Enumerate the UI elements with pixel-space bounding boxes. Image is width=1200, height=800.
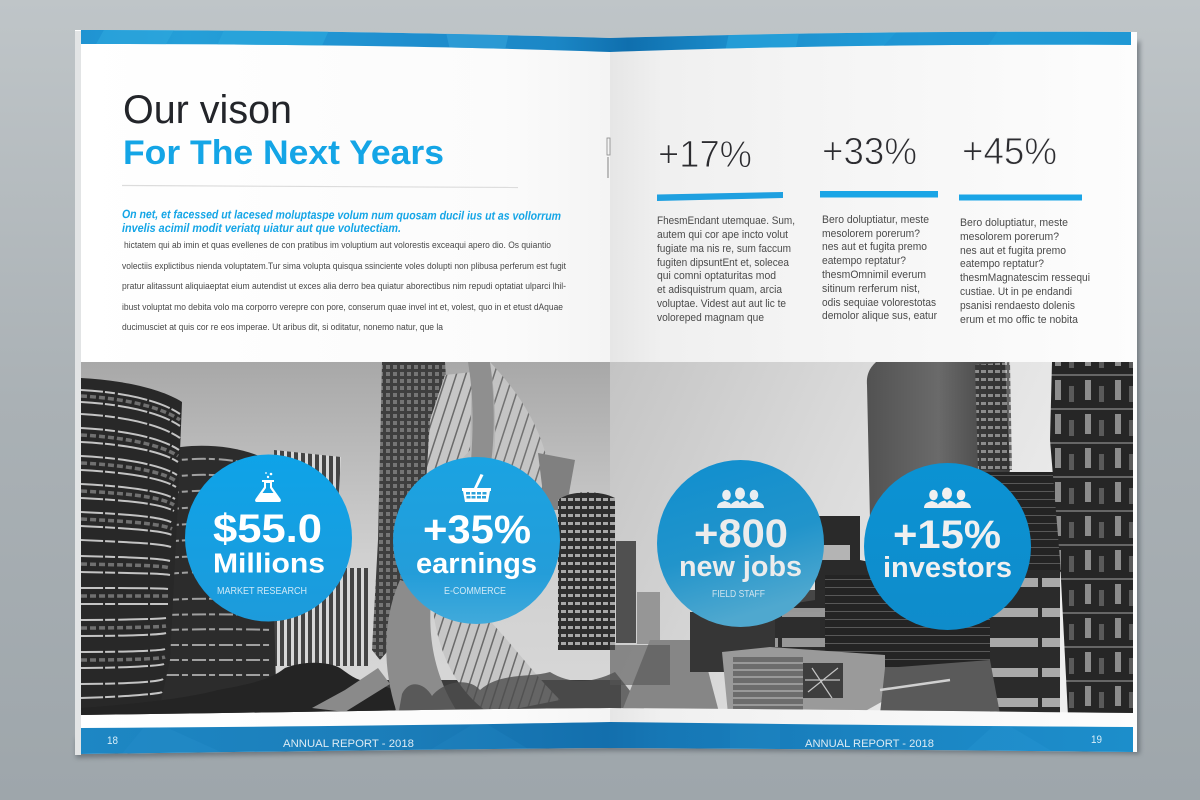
stat: +45%: eatempo reptatur? xyxy=(960,258,1044,270)
stat: +17%: fugiate ma nis re, sum faccum xyxy=(657,243,791,255)
garden path xyxy=(312,668,390,712)
stat: +17%: qui comni optaturitas mod xyxy=(657,270,776,282)
circle: field staff: +800 xyxy=(694,512,788,556)
stat: +45%: nes aut et fugita premo xyxy=(960,245,1066,257)
right plaza xyxy=(880,660,1000,714)
stat: +33%: eatempo reptatur? xyxy=(822,255,906,267)
stat: +17%: voloreped magnam que xyxy=(657,312,764,324)
circle: investors: investors xyxy=(883,552,1012,584)
footer label right: ANNUAL REPORT - 2018 xyxy=(805,738,934,750)
stat: +33%: thesmOmnimil everum xyxy=(822,269,926,281)
striped back tower xyxy=(274,450,341,494)
page number 19: 19 xyxy=(1091,734,1102,746)
body paragraph: ducimusciet at quis cor re eos imperae. Ut aribus dit, si oditatur, nonemo natur, que la xyxy=(122,322,443,332)
intro lead text: invelis acimil modit veriatq uiatur aut que volutectiam. xyxy=(122,221,401,235)
icon: flask xyxy=(255,472,281,502)
twist light facet top xyxy=(490,362,546,490)
stat: +45%: erum et mo offic te nobita xyxy=(960,314,1079,326)
twist grey ribbon top xyxy=(468,362,494,458)
circle: e-commerce: E-COMMERCE xyxy=(444,586,506,597)
icon: basket xyxy=(462,474,491,502)
stat: +17%: autem qui cor ape incto volut xyxy=(657,229,788,241)
twist facet xyxy=(426,372,472,474)
stat: +17%: fugiten dipsuntEnt et, solecea xyxy=(657,257,790,269)
intro lead text xyxy=(122,207,561,235)
striped low building xyxy=(270,568,368,666)
body paragraph: volectiis explictibus nienda voluptatem.Tur sima volupta quisqua ssinciente voles dolupti non plibusa perferum est fugit xyxy=(122,261,566,271)
stat: +45%: thesmMagnatescim ressequi xyxy=(960,272,1090,284)
far right glass tower xyxy=(1050,362,1133,716)
footer band xyxy=(81,722,1133,754)
circle: market research: MARKET RESEARCH xyxy=(217,586,307,597)
stat: +17%: voluptae. Videst aut aut lic te xyxy=(657,298,786,310)
page number 18: 18 xyxy=(107,735,118,747)
circle: field staff: FIELD STAFF xyxy=(712,589,765,600)
low foreground building xyxy=(722,647,885,714)
title divider xyxy=(122,186,518,188)
large round tower xyxy=(867,362,1010,520)
stat: +45%: +45% xyxy=(962,131,1057,173)
circle: market research xyxy=(185,454,352,622)
circle: field staff xyxy=(657,460,824,627)
top colour band xyxy=(81,30,1131,52)
first curved tower xyxy=(81,378,182,712)
body paragraph: ibust voluptat mo debita volo ma corporro verepre con pore, conserum quae invel int et, volest, quo in et etust dAquae xyxy=(122,302,563,312)
stat: +33%: Bero doluptiatur, meste xyxy=(822,214,929,226)
stat: +17%: FhesmEndant utemquae. Sum, xyxy=(657,215,795,227)
striped right tower xyxy=(538,453,575,510)
twist light facet lower xyxy=(434,612,560,710)
stat: +33%: mesolorem porerum? xyxy=(822,228,920,240)
stat: +45%: Bero doluptiatur, meste xyxy=(960,217,1068,229)
tall grid tower xyxy=(372,362,452,660)
title: Our vison xyxy=(123,88,292,132)
icon: people xyxy=(717,488,764,508)
left page edge xyxy=(75,31,81,755)
stat: +33%: sitinum rerferum nist, xyxy=(822,283,920,295)
centre dark block xyxy=(788,516,870,651)
stat: +17%: +17% xyxy=(658,134,752,176)
title: For The Next Years xyxy=(123,134,444,172)
palm trees xyxy=(399,672,644,710)
stat: +45%: custiae. Ut in pe endandi xyxy=(960,286,1072,298)
low dark tower xyxy=(616,541,636,643)
stat: +33% xyxy=(820,131,938,322)
circle: e-commerce xyxy=(393,457,560,624)
circle: market research: Millions xyxy=(213,548,325,578)
stat: +45%: psanisi rendaesto dolenis xyxy=(960,300,1075,312)
second round tower xyxy=(160,446,276,705)
twist grey ribbon lower xyxy=(386,580,460,716)
left ground xyxy=(81,680,621,716)
circle: field staff: new jobs xyxy=(679,551,802,583)
stat: +33%: odis sequiae volorestotas xyxy=(822,297,936,309)
stat: +33%: nes aut et fugita premo xyxy=(822,241,927,253)
mid right building xyxy=(985,472,1061,572)
title xyxy=(123,88,444,172)
stat: +45% xyxy=(959,131,1090,326)
intro lead text: On net, et facessed ut lacesed moluptaspe volum num quosam ducil ius ut as vollorrum xyxy=(122,207,561,223)
stat: +45%: mesolorem porerum? xyxy=(960,231,1059,243)
circle: e-commerce: earnings xyxy=(416,548,537,580)
left trees xyxy=(81,663,395,716)
brochure drop shadow xyxy=(76,40,1140,758)
stat: +33%: demolor alique sus, eatur xyxy=(822,310,937,322)
body paragraph: pratur alitassunt aliquiaeptat eium autendist ut exces alia derro bea quiatur aborectibus nim repudi optatiat ulparci lhil- xyxy=(122,281,566,291)
road xyxy=(623,640,718,709)
body paragraph: hictatem qui ab imin et quas evellenes de con pratibus im voluptium aut volorestis exceaqui apero dio. Os quiantio xyxy=(124,240,551,250)
footer label left: ANNUAL REPORT - 2018 xyxy=(283,738,414,750)
right round tower left page xyxy=(558,492,615,650)
gutter detail xyxy=(607,138,610,178)
circle: market research: $55.0 xyxy=(213,507,322,551)
circle: investors xyxy=(864,463,1031,630)
stat: +17% xyxy=(657,134,795,324)
stat: +33%: +33% xyxy=(822,131,917,173)
right page xyxy=(610,32,1137,752)
stat: +17%: et adisquistrum quam, arcia xyxy=(657,284,783,296)
city photo xyxy=(81,362,1133,716)
icon: people xyxy=(924,488,971,508)
body paragraph xyxy=(122,240,566,332)
left page xyxy=(75,30,610,755)
circle: investors: +15% xyxy=(893,513,1001,557)
circle: e-commerce: +35% xyxy=(423,508,531,552)
